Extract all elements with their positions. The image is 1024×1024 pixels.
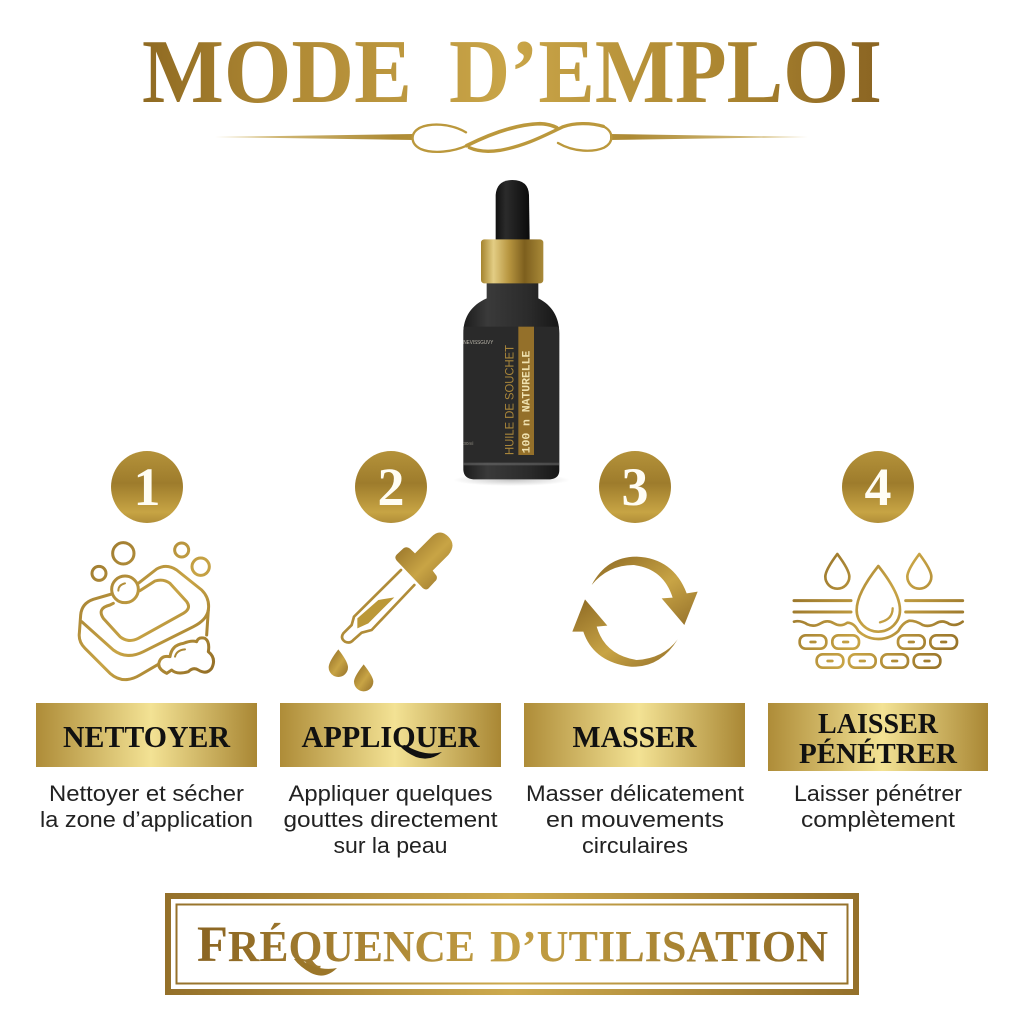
frequency heading: D’UTILISATION [490, 922, 828, 971]
banner: laisser pénétrer: LAISSER [818, 708, 939, 740]
step 2 number badge: 2 [378, 457, 404, 517]
text: step 2 description [284, 781, 498, 858]
product bottle: 100 n NATURELLE [522, 351, 534, 453]
step 1 number badge [111, 451, 183, 523]
frequency heading: FRÉQUENCE [197, 917, 477, 973]
banner: masser: MASSER [572, 719, 697, 754]
text: step 3 description: en mouvements [546, 807, 724, 832]
text: step 4 description: complètement [801, 807, 955, 832]
step 1 number badge: 1 [134, 457, 160, 517]
text: step 1 description: la zone d’application [40, 807, 253, 832]
banner: laisser pénétrer [768, 703, 988, 771]
text: step 4 description [794, 781, 962, 832]
title: D’EMPLOI [449, 21, 882, 122]
icon: circular arrows [572, 557, 698, 667]
text: step 2 description: sur la peau [334, 833, 448, 858]
banner: laisser pénétrer: PÉNÉTRER [799, 737, 958, 770]
text: step 3 description: Masser délicatement [526, 781, 744, 806]
product bottle: 30ml [463, 441, 473, 446]
banner: masser [524, 703, 745, 767]
step 2 number badge [355, 451, 427, 523]
text: step 2 description: Appliquer quelques [288, 781, 492, 806]
text: step 4 description: Laisser pénétrer [794, 781, 962, 806]
product bottle [453, 180, 570, 486]
step 4 number badge: 4 [864, 457, 892, 517]
product bottle: NEVISSGUVY [463, 340, 494, 346]
text: step 1 description: Nettoyer et sécher [49, 781, 244, 806]
text: step 1 description [40, 781, 253, 832]
step 3 number badge: 3 [622, 457, 648, 517]
icon: skin layers with drops [794, 554, 963, 668]
banner: appliquer: APPLIQUER [302, 719, 480, 754]
frequency heading [197, 917, 828, 976]
banner: nettoyer: NETTOYER [63, 719, 231, 754]
text: step 3 description [526, 781, 744, 858]
icon: soap bar with bubbles [79, 543, 214, 680]
ornamental divider [215, 124, 808, 152]
icon: pipette with drops [329, 532, 452, 691]
title: MODE [142, 21, 412, 122]
step 4 number badge [842, 451, 914, 523]
text: step 2 description: gouttes directement [284, 807, 498, 832]
framed frequency panel [168, 896, 856, 992]
text: step 3 description: circulaires [582, 833, 688, 858]
product bottle: HUILE DE SOUCHET [502, 344, 516, 455]
banner: appliquer [280, 703, 501, 767]
step 3 number badge [599, 451, 671, 523]
banner: nettoyer [36, 703, 257, 767]
